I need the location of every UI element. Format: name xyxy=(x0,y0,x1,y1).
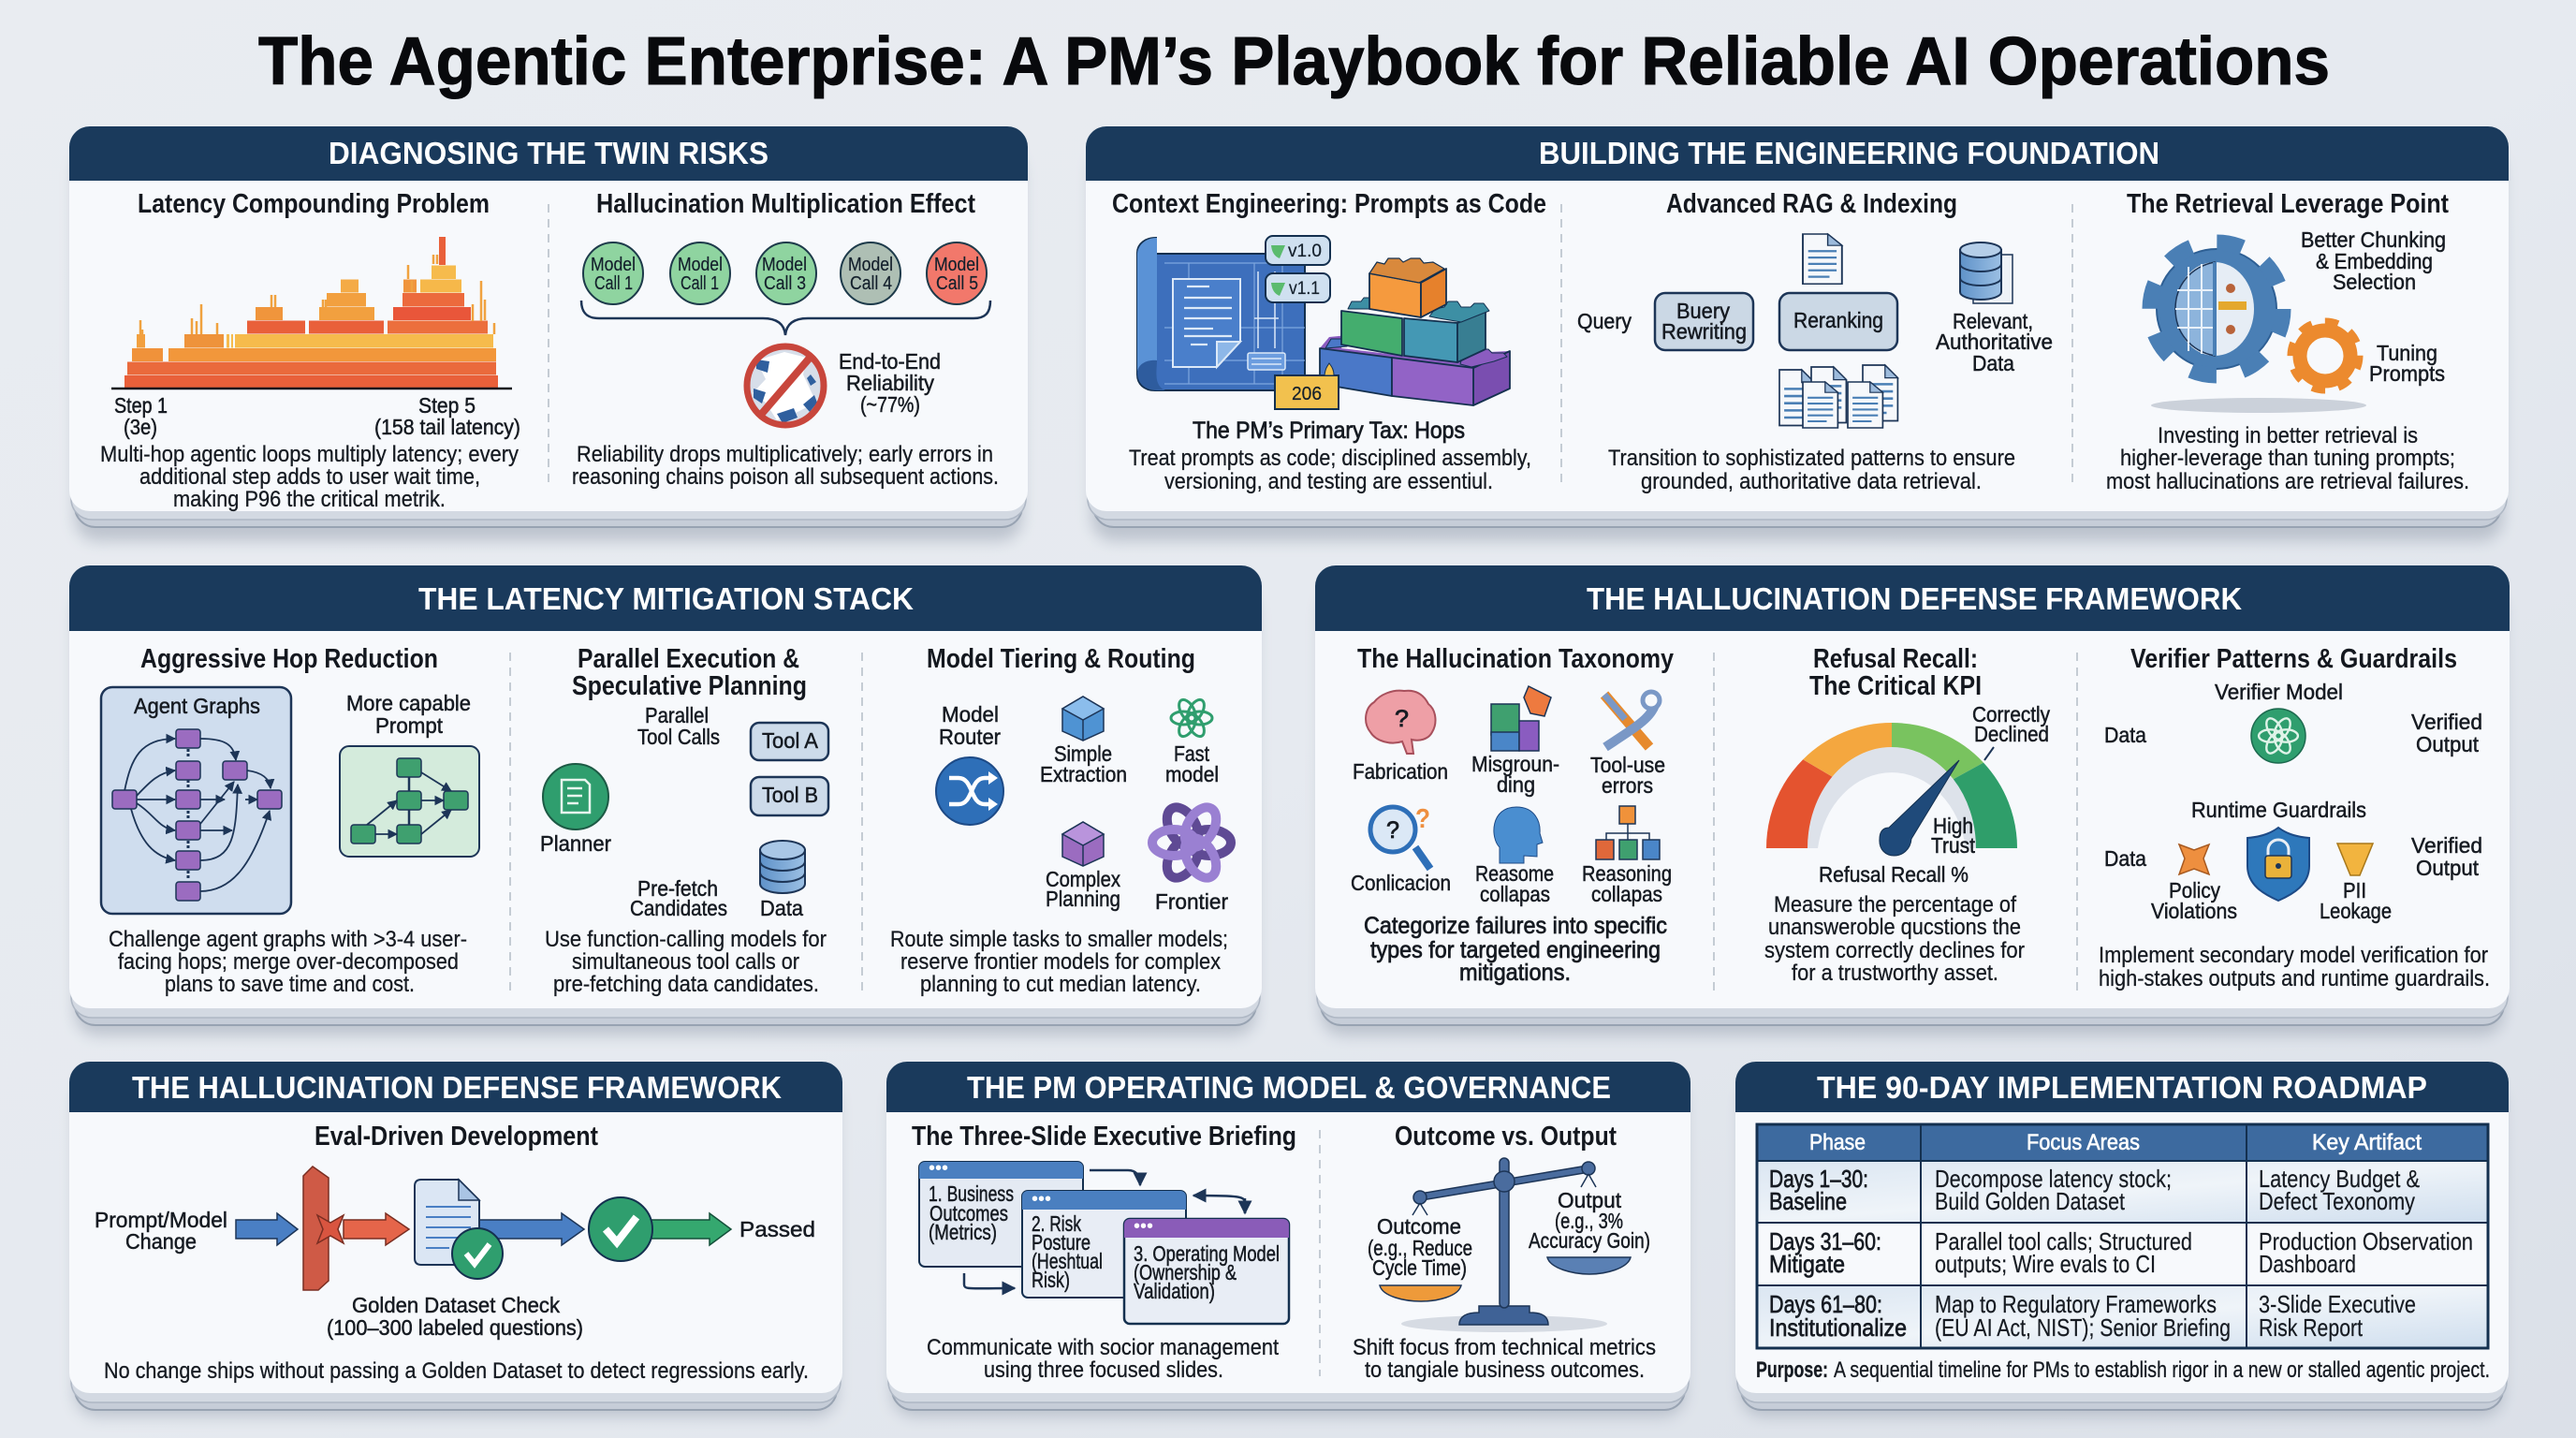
icon: brain xyxy=(1366,691,1435,754)
label: tuning prompts xyxy=(2369,341,2445,386)
label: parallel tool calls: Parallel xyxy=(645,703,709,727)
label: correctly declined xyxy=(1972,702,2050,746)
labels: taxonomy row one: ding xyxy=(1497,772,1535,797)
label: complex planning: Planning xyxy=(1046,887,1120,911)
subheading: refusal recall: Refusal Recall: xyxy=(1813,644,1978,674)
label: outcome: Cycle Time) xyxy=(1372,1255,1467,1280)
arrow: red blocked xyxy=(344,1213,409,1245)
text: rag description xyxy=(1608,446,2015,494)
text: briefing description xyxy=(927,1335,1279,1383)
slide 2: risk posture: ••• xyxy=(1032,1189,1051,1210)
model call chain: Model xyxy=(934,255,979,275)
text: retrieval description xyxy=(2106,423,2469,494)
subheading: parallel execution: Speculative Planning xyxy=(572,671,807,701)
label: more capable prompt: Prompt xyxy=(375,713,444,738)
label: outcome xyxy=(1368,1214,1472,1280)
label: outcome: (e.g., Reduce xyxy=(1368,1236,1472,1260)
text: reliability description xyxy=(572,442,999,490)
arrow: green passed xyxy=(646,1213,731,1245)
text: briefing description: Communicate with socior management xyxy=(927,1335,1279,1360)
subheading: eval-driven development: Eval-Driven Development xyxy=(315,1122,598,1152)
arrow: blue input xyxy=(236,1213,298,1245)
model call chain: Call 5 xyxy=(936,273,978,294)
icon: policy violation x xyxy=(2179,844,2209,874)
table: roadmap: Key Artifact xyxy=(2312,1130,2422,1155)
chart axis labels: (3e) xyxy=(124,415,157,439)
model call chain: Model xyxy=(591,255,636,275)
panel: latency mitigation stack xyxy=(69,565,1262,1035)
label: data: Data xyxy=(760,896,803,920)
box: reranking xyxy=(1779,293,1897,350)
icon: planner: Planner xyxy=(540,831,611,856)
subheading: verifier patterns: Verifier Patterns & Guardrails xyxy=(2130,644,2457,674)
subheading: parallel execution xyxy=(572,644,807,701)
icon: golden dataset document xyxy=(415,1180,503,1279)
illustration: blueprint xyxy=(1137,238,1305,390)
slide 2: risk posture: 2. Risk xyxy=(1032,1211,1081,1236)
panel heading: THE HALLUCINATION DEFENSE FRAMEWORK xyxy=(132,1070,782,1105)
text: refusal recall description: Measure the percentage of xyxy=(1774,892,2016,917)
table: roadmap: Build Golden Dataset xyxy=(1935,1187,2126,1215)
subheading: context engineering: Context Engineering: Prompts as Code xyxy=(1112,189,1546,219)
icon: purple cube xyxy=(1062,822,1104,866)
icon: head xyxy=(1494,807,1543,863)
slide 2: risk posture: (Heshtual xyxy=(1032,1249,1103,1273)
panel heading: THE PM OPERATING MODEL & GOVERNANCE xyxy=(967,1070,1611,1105)
box: query rewriting: Buery xyxy=(1676,299,1730,323)
panel: building the engineering foundation xyxy=(1086,126,2509,541)
text: verifier description: Implement secondary model verification for xyxy=(2099,943,2488,968)
label: tuning prompts: Tuning xyxy=(2377,341,2437,365)
slide 1: business outcomes xyxy=(919,1158,1083,1267)
table: roadmap: Map to Regulatory Frameworks xyxy=(1935,1290,2217,1318)
slide 3: operating model: Validation) xyxy=(1134,1279,1215,1303)
label: fast model: Fast xyxy=(1174,741,1210,766)
label: prompt/model change: Prompt/Model xyxy=(95,1208,227,1232)
icon: org chart xyxy=(1596,806,1660,859)
panel: diagnosing the twin risks xyxy=(69,126,1028,541)
slide 1: business outcomes: ••• xyxy=(929,1158,948,1179)
subheading: outcome vs output: Outcome vs. Output xyxy=(1395,1122,1617,1152)
label: better chunking: Selection xyxy=(2333,270,2416,294)
table: roadmap: Days 61–80: xyxy=(1769,1290,1882,1318)
label: pre-fetch candidates xyxy=(630,876,727,920)
label: output xyxy=(1529,1188,1650,1253)
text: purpose statement: Purpose: xyxy=(1756,1357,1828,1383)
table: roadmap: Days 31–60: xyxy=(1769,1227,1881,1255)
text: prompts as code: The PM’s Primary Tax: Hops xyxy=(1193,418,1465,444)
text: reliability description: reasoning chains poison all subsequent actions. xyxy=(572,464,999,490)
label: simple extraction: Extraction xyxy=(1040,762,1127,786)
text: parallel description: simultaneous tool calls or xyxy=(572,949,799,975)
text: latency description: making P96 the critical metrik. xyxy=(173,487,446,512)
labels: guardrail items: PII xyxy=(2343,878,2366,902)
model call chain: Call 1 xyxy=(681,273,719,294)
icon: red barrier xyxy=(303,1167,329,1290)
illustration: building blocks xyxy=(1320,258,1510,405)
text: outcome description: to tangiale business outcomes. xyxy=(1365,1357,1645,1383)
table: roadmap: Risk Report xyxy=(2259,1313,2364,1342)
panel: 90-day implementation roadmap xyxy=(1735,1062,2509,1416)
sticky note: 206 xyxy=(1292,384,1322,404)
chart axis labels xyxy=(114,393,520,439)
text: hop reduction description xyxy=(109,927,467,997)
text: eval description: No change ships without passing a Golden Dataset to detect regressions early. xyxy=(104,1358,809,1384)
panel heading: BUILDING THE ENGINEERING FOUNDATION xyxy=(1539,136,2159,170)
label: high trust xyxy=(1931,814,1976,858)
model call chain: Model xyxy=(848,255,893,275)
model call chain: Call 3 xyxy=(764,273,806,294)
label: correctly declined: Correctly xyxy=(1972,702,2050,726)
label: high trust: Trust xyxy=(1931,833,1976,858)
label: output: Accuracy Goin) xyxy=(1529,1228,1650,1253)
labels: taxonomy row two: Reasoning xyxy=(1582,861,1672,886)
panel heading: THE LATENCY MITIGATION STACK xyxy=(418,581,914,616)
table: roadmap: (EU AI Act, NIST); Senior Briefing xyxy=(1935,1313,2231,1342)
slide 1: business outcomes: Outcomes xyxy=(929,1201,1008,1225)
label: frontier: Frontier xyxy=(1155,889,1228,914)
text: routing description: planning to cut median latency. xyxy=(920,972,1201,997)
text: routing description xyxy=(890,927,1228,997)
icon: router xyxy=(936,757,1003,825)
box: tool a: Tool A xyxy=(762,728,819,753)
icon: red x xyxy=(317,1215,344,1243)
label: end-to-end reliability xyxy=(839,349,941,417)
subheading: model tiering: Model Tiering & Routing xyxy=(927,644,1195,674)
icon: frontier knot xyxy=(1152,802,1231,883)
model call chain: Model xyxy=(678,255,723,275)
label: verified output xyxy=(2411,710,2482,756)
labels: taxonomy row one: Tool-use xyxy=(1590,753,1665,777)
icon: small gear xyxy=(2291,322,2359,389)
subheading: advanced rag: Advanced RAG & Indexing xyxy=(1666,189,1957,219)
slide 2: risk posture: Risk) xyxy=(1032,1268,1070,1292)
labels: guardrail items: Policy xyxy=(2169,878,2220,902)
table: roadmap: Latency Budget & xyxy=(2259,1165,2420,1193)
label: simple extraction: Simple xyxy=(1054,741,1112,766)
badge: v1.1 xyxy=(1266,273,1330,302)
panel: eval-driven development xyxy=(69,1062,842,1416)
title: The Agentic Enterprise: A PM’s Playbook for Reliable AI Operations xyxy=(258,24,2330,99)
model call chain: Model xyxy=(762,255,807,275)
text: latency description: Multi-hop agentic loops multiply latency; every xyxy=(100,442,520,467)
subheading: refusal recall: The Critical KPI xyxy=(1809,671,1982,701)
label: model router xyxy=(939,702,1001,749)
label: pre-fetch candidates: Pre-fetch xyxy=(637,876,718,901)
text: latency description: additional step adds to user wait time, xyxy=(139,464,480,490)
chart axis labels: Step 1 xyxy=(114,393,168,418)
label: output: Output xyxy=(1558,1188,1622,1212)
diagram: agent graphs xyxy=(101,687,291,914)
subheading: three-slide briefing: The Three-Slide Executive Briefing xyxy=(912,1122,1296,1152)
label: prompt/model change: Change xyxy=(125,1229,197,1254)
label: query: Query xyxy=(1577,309,1632,333)
icon: database stack xyxy=(1960,242,2012,303)
panel heading: THE 90-DAY IMPLEMENTATION ROADMAP xyxy=(1817,1070,2427,1105)
text: refusal recall description: system correctly declines for xyxy=(1764,938,2025,963)
text: refusal recall description xyxy=(1764,892,2025,986)
text: retrieval description: most hallucinations are retrieval failures. xyxy=(2106,469,2469,494)
text: parallel description: Use function-calling models for xyxy=(545,927,827,952)
icon: planner xyxy=(540,764,611,856)
table: roadmap: Days 1–30: xyxy=(1769,1165,1868,1193)
table: roadmap: Parallel tool calls; Structured xyxy=(1935,1227,2192,1255)
box: query rewriting xyxy=(1655,293,1753,350)
illustration: balance scale xyxy=(1380,1158,1631,1332)
slide 3: operating model: ••• xyxy=(1134,1216,1153,1237)
labels: taxonomy row two: Reasome xyxy=(1475,861,1554,886)
icon: brain: ? xyxy=(1395,706,1409,732)
table: roadmap: 3-Slide Executive xyxy=(2259,1290,2416,1318)
table: roadmap: Decompose latency stock; xyxy=(1935,1165,2172,1193)
label: parallel tool calls: Tool Calls xyxy=(637,725,720,749)
labels: taxonomy row two: Conlicacion xyxy=(1351,871,1451,895)
label: outcome: Outcome xyxy=(1377,1214,1461,1239)
label: end-to-end reliability: Reliability xyxy=(846,371,934,395)
icon: document cluster xyxy=(1779,365,1897,428)
chart axis labels: (158 tail latency) xyxy=(374,415,520,439)
label: correctly declined: Declined xyxy=(1974,722,2049,746)
arrows between slides xyxy=(964,1170,1245,1288)
text: retrieval description: higher-leverage than tuning prompts; xyxy=(2120,446,2455,471)
subheading: latency compounding: Latency Compounding Problem xyxy=(138,189,490,219)
panel: pm operating model and governance xyxy=(886,1062,1690,1416)
text: taxonomy description xyxy=(1364,913,1667,986)
label: model router: Model xyxy=(942,702,999,726)
subheading: refusal recall xyxy=(1809,644,1982,701)
box: tool b: Tool B xyxy=(762,783,818,807)
table: roadmap: Baseline xyxy=(1769,1187,1847,1215)
icon: magnifier: ? xyxy=(1415,804,1430,834)
text: refusal recall description: unansweroble qucstions the xyxy=(1768,915,2021,940)
icon: puzzle xyxy=(1491,686,1551,751)
text: outcome description xyxy=(1353,1335,1656,1383)
text: retrieval description: Investing in better retrieval is xyxy=(2158,423,2418,448)
label: better chunking: & Embedding xyxy=(2316,249,2433,273)
labels: taxonomy row one: Misgroun- xyxy=(1471,752,1559,776)
icon: magnifier: ? xyxy=(1386,817,1399,844)
text: prompts as code: Treat prompts as code; disciplined assembly, xyxy=(1129,446,1531,471)
label: verified output: Output xyxy=(2416,732,2480,756)
icon: document xyxy=(1803,234,1842,284)
slide 3: operating model xyxy=(1124,1216,1289,1324)
model call chain xyxy=(583,242,987,304)
label: complex planning xyxy=(1046,867,1120,911)
label: data input: Data xyxy=(2104,723,2146,747)
label: relevant data: Data xyxy=(1972,351,2014,375)
subheading: hop reduction: Aggressive Hop Reduction xyxy=(140,644,438,674)
label: relevant data: Authoritative xyxy=(1936,330,2053,354)
labels: taxonomy row two: collapas xyxy=(1480,882,1550,906)
label: simple extraction xyxy=(1040,741,1127,786)
icon: prohibited reliability xyxy=(747,346,824,425)
slide 3: operating model: 3. Operating Model xyxy=(1134,1241,1280,1266)
box: query rewriting: Rewriting xyxy=(1661,319,1747,344)
icon: tools xyxy=(1604,692,1660,747)
icon: pii filter xyxy=(2337,844,2373,875)
labels: guardrail items xyxy=(2151,878,2392,923)
diagram: simplified prompt graph xyxy=(340,746,479,857)
labels: taxonomy row two: collapas xyxy=(1591,882,1662,906)
box: tool a xyxy=(751,723,828,760)
label: pre-fetch candidates: Candidates xyxy=(630,896,727,920)
chart: refusal recall gauge xyxy=(1766,723,2017,856)
label: data input 2: Data xyxy=(2104,846,2146,871)
text: latency description xyxy=(100,442,520,512)
label: relevant data: Relevant, xyxy=(1953,309,2033,333)
icon: magnifier xyxy=(1370,804,1430,869)
label: model router: Router xyxy=(939,725,1001,749)
label: passed: Passed xyxy=(739,1217,815,1241)
label: fast model xyxy=(1165,741,1219,786)
label: verified output 2: Output xyxy=(2416,856,2480,880)
icon: data cylinder xyxy=(760,841,805,893)
label: verifier model: Verifier Model xyxy=(2215,680,2343,704)
label: prompt/model change xyxy=(95,1208,227,1254)
icon: green check xyxy=(589,1197,652,1261)
labels: guardrail items: Violations xyxy=(2151,899,2237,923)
model call chain: Call 4 xyxy=(850,273,892,294)
table: roadmap: Dashboard xyxy=(2259,1250,2356,1278)
text: routing description: Route simple tasks to smaller models; xyxy=(890,927,1228,952)
label: relevant data xyxy=(1936,309,2053,375)
text: rag description: Transition to sophistizated patterns to ensure xyxy=(1608,446,2015,471)
badge: v1.1: v1.1 xyxy=(1289,279,1320,299)
label: better chunking xyxy=(2301,227,2446,294)
subheading: taxonomy: The Hallucination Taxonomy xyxy=(1357,644,1674,674)
text: refusal recall description: for a trustworthy asset. xyxy=(1792,961,1998,986)
label: tuning prompts: Prompts xyxy=(2369,361,2445,386)
diagram: agent graphs: Agent Graphs xyxy=(134,694,260,718)
slide 1: business outcomes: (Metrics) xyxy=(929,1220,997,1244)
text: hop reduction description: facing hops; merge over-decomposed xyxy=(118,949,459,975)
labels: guardrail items: Leokage xyxy=(2320,899,2392,923)
text: verifier description: high-stakes outputs and runtime guardrails. xyxy=(2099,966,2490,991)
label: golden dataset check: (100–300 labeled questions) xyxy=(327,1315,583,1340)
text: hop reduction description: plans to save time and cost. xyxy=(165,972,415,997)
text: reliability description: Reliability drops multiplicatively; early errors in xyxy=(577,442,993,467)
text: rag description: grounded, authoritative data retrieval. xyxy=(1641,469,1982,494)
text: briefing description: using three focused slides. xyxy=(984,1357,1223,1383)
text: prompts as code: versioning, and testing are essentiul. xyxy=(1164,469,1493,494)
subheading: retrieval leverage: The Retrieval Leverage Point xyxy=(2127,189,2449,219)
box: reranking: Reranking xyxy=(1793,308,1883,332)
icon: shield lock xyxy=(2247,828,2309,901)
labels: taxonomy row one: Fabrication xyxy=(1353,759,1448,784)
label: runtime guardrails: Runtime Guardrails xyxy=(2191,798,2366,822)
icon: verifier knot xyxy=(2251,709,2305,763)
table: roadmap: Focus Areas xyxy=(2027,1130,2140,1155)
text: parallel description: pre-fetching data candidates. xyxy=(553,972,819,997)
slide 2: risk posture xyxy=(1022,1189,1186,1298)
sticky note xyxy=(1275,363,1339,409)
label: high trust: High xyxy=(1933,814,1973,838)
label: verified output: Verified xyxy=(2411,710,2482,734)
arrow: blue pass-through xyxy=(479,1213,584,1245)
label: complex planning: Complex xyxy=(1046,867,1120,891)
label: golden dataset check xyxy=(327,1293,583,1340)
table: roadmap: outputs; Wire evals to CI xyxy=(1935,1250,2156,1278)
text: taxonomy description: Categorize failures into specific xyxy=(1364,913,1667,939)
label: end-to-end reliability: End-to-End xyxy=(839,349,941,374)
text: verifier description xyxy=(2099,943,2490,991)
label: refusal recall %: Refusal Recall % xyxy=(1819,862,1969,887)
slide 1: business outcomes: 1. Business xyxy=(929,1181,1014,1206)
text: prompts as code xyxy=(1129,418,1531,494)
text: routing description: reserve frontier models for complex xyxy=(900,949,1221,975)
badge: v1.0: v1.0 xyxy=(1288,242,1322,261)
label: golden dataset check: Golden Dataset Check xyxy=(352,1293,560,1317)
slide 2: risk posture: Posture xyxy=(1032,1230,1090,1255)
text: taxonomy description: types for targeted engineering xyxy=(1370,937,1661,963)
label: fast model: model xyxy=(1165,762,1219,786)
chart: latency flame stack xyxy=(111,237,512,389)
label: end-to-end reliability: (~77%) xyxy=(860,392,920,417)
label: parallel tool calls xyxy=(637,703,720,749)
text: hop reduction description: Challenge agent graphs with >3-4 user- xyxy=(109,927,467,952)
box: tool b xyxy=(751,777,828,815)
badge: v1.0 xyxy=(1266,236,1330,265)
label: verified output 2 xyxy=(2411,833,2482,880)
icon: large gear xyxy=(2150,242,2366,413)
slide 3: operating model: (Ownership & xyxy=(1134,1260,1237,1284)
labels: taxonomy row two xyxy=(1351,861,1672,906)
panel: hallucination defense framework xyxy=(1315,565,2510,1035)
text: parallel description xyxy=(545,927,827,997)
table: roadmap xyxy=(1757,1124,2488,1348)
subheading: hallucination multiplication: Hallucination Multiplication Effect xyxy=(596,189,975,219)
label: more capable prompt xyxy=(346,691,471,738)
label: better chunking: Better Chunking xyxy=(2301,227,2446,252)
table: roadmap: Institutionalize xyxy=(1769,1313,1907,1342)
label: verified output 2: Verified xyxy=(2411,833,2482,858)
text: taxonomy description: mitigations. xyxy=(1459,960,1571,986)
label: more capable prompt: More capable xyxy=(346,691,471,715)
table: roadmap: Mitigate xyxy=(1769,1250,1845,1278)
chart axis labels: Step 5 xyxy=(418,393,476,418)
subheading: parallel execution: Parallel Execution & xyxy=(578,644,799,674)
table: roadmap: Production Observation xyxy=(2259,1227,2473,1255)
table: roadmap: Phase xyxy=(1809,1130,1866,1155)
text: outcome description: Shift focus from technical metrics xyxy=(1353,1335,1656,1360)
labels: taxonomy row one xyxy=(1353,752,1665,798)
brace xyxy=(581,301,990,335)
model call chain: Call 1 xyxy=(594,273,633,294)
panel heading: DIAGNOSING THE TWIN RISKS xyxy=(329,136,768,170)
table: roadmap: Defect Texonomy xyxy=(2259,1187,2415,1215)
icon: fast model knot xyxy=(1171,697,1212,740)
label: output: (e.g., 3% xyxy=(1555,1209,1623,1233)
panel heading: THE HALLUCINATION DEFENSE FRAMEWORK xyxy=(1587,581,2242,616)
labels: taxonomy row one: errors xyxy=(1602,773,1653,798)
icon: blue cube xyxy=(1062,697,1104,741)
